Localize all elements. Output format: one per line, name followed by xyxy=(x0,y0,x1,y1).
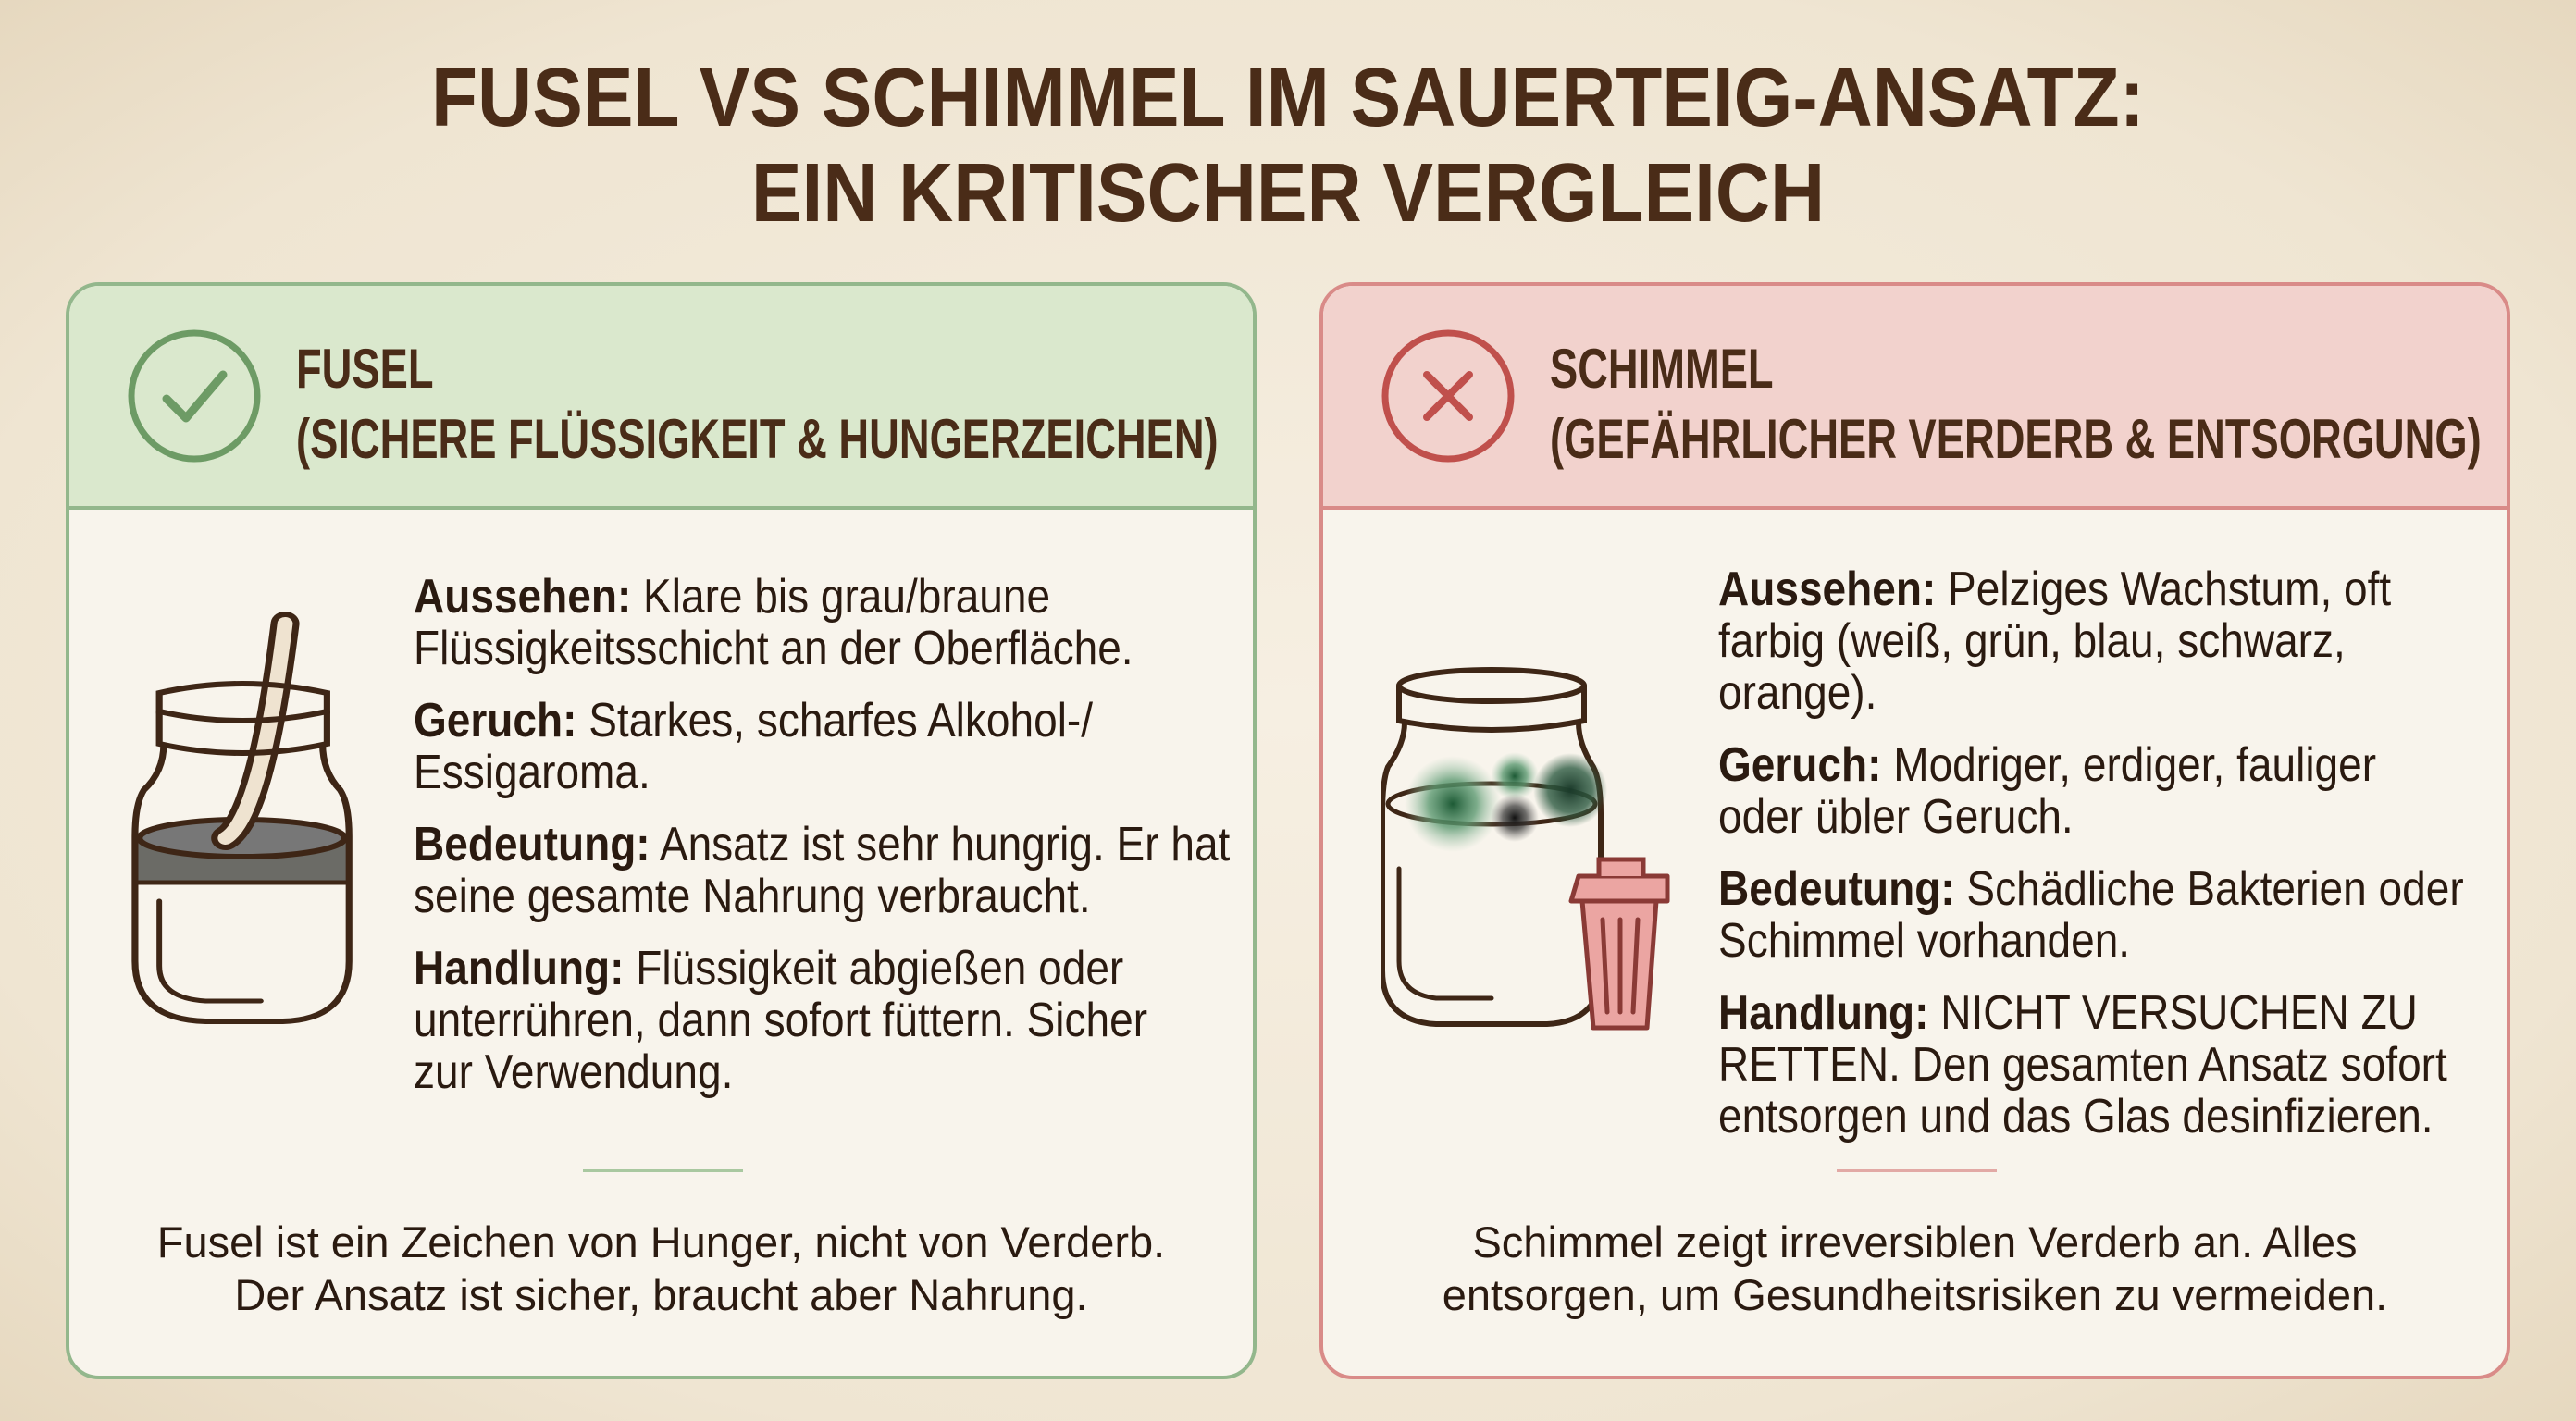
header: fusel xyxy=(69,286,1253,510)
title: EIN KRITISCHER VERGLEICH xyxy=(751,147,1825,240)
text block: fusel details: seine gesamte Nahrung verbraucht. xyxy=(414,870,1091,923)
panel: schimmel xyxy=(1319,282,2510,1379)
text block: fusel details: unterrühren, dann sofort füttern. Sicher xyxy=(414,994,1147,1047)
title xyxy=(431,52,2145,240)
text block: fusel details: Bedeutung: Ansatz ist sehr hungrig. Er hat xyxy=(414,818,1230,871)
footer: fusel summary xyxy=(157,1217,1165,1319)
text block: schimmel details: orange). xyxy=(1718,666,1876,720)
heading: schimmel: SCHIMMEL xyxy=(1550,338,1774,400)
text block: fusel details: zur Verwendung. xyxy=(414,1045,733,1099)
text block: fusel details xyxy=(414,570,1230,1099)
text block: fusel details: Geruch: Starkes, scharfes Alkohol-/ xyxy=(414,694,1093,748)
footer: fusel summary: Fusel ist ein Zeichen von Hunger, nicht von Verderb. xyxy=(157,1217,1165,1267)
heading: fusel xyxy=(296,338,1219,470)
text block: schimmel details: oder übler Geruch. xyxy=(1718,790,2074,844)
footer: fusel summary: Der Ansatz ist sicher, braucht aber Nahrung. xyxy=(234,1270,1088,1319)
footer: schimmel summary: entsorgen, um Gesundheitsrisiken zu vermeiden. xyxy=(1443,1270,2387,1319)
icon: x circle xyxy=(1382,329,1514,463)
heading: schimmel xyxy=(1550,338,2482,470)
text block: fusel details: Flüssigkeitsschicht an der Oberfläche. xyxy=(414,622,1133,675)
footer: schimmel summary: Schimmel zeigt irreversiblen Verderb an. Alles xyxy=(1472,1217,2358,1267)
icon: jar with hooch xyxy=(131,612,353,1024)
text block: schimmel details: farbig (weiß, grün, blau, schwarz, xyxy=(1718,614,2346,668)
panel: fusel xyxy=(66,282,1257,1379)
text block: fusel details: Handlung: Flüssigkeit abgießen oder xyxy=(414,942,1123,995)
title: FUSEL VS SCHIMMEL IM SAUERTEIG-ANSATZ: xyxy=(431,52,2145,144)
text block: schimmel details: Bedeutung: Schädliche Bakterien oder xyxy=(1718,862,2464,916)
heading: fusel: FUSEL xyxy=(296,338,433,400)
text block: schimmel details: Geruch: Modriger, erdiger, fauliger xyxy=(1718,738,2376,792)
text block: fusel details: Aussehen: Klare bis grau/braune xyxy=(414,570,1050,624)
heading: fusel: (SICHERE FLÜSSIGKEIT & HUNGERZEICHEN) xyxy=(296,408,1219,470)
icon: moldy jar with trash bin xyxy=(1381,667,1669,1031)
text block: schimmel details: Handlung: NICHT VERSUCHEN ZU xyxy=(1718,986,2418,1040)
icon: check circle xyxy=(128,329,261,463)
text block: schimmel details: Aussehen: Pelziges Wachstum, oft xyxy=(1718,562,2391,616)
text block: schimmel details xyxy=(1718,562,2464,1143)
text block: schimmel details: Schimmel vorhanden. xyxy=(1718,914,2130,968)
heading: schimmel: (GEFÄHRLICHER VERDERB & ENTSORGUNG) xyxy=(1550,408,2482,470)
footer: schimmel summary xyxy=(1443,1217,2387,1319)
text block: schimmel details: RETTEN. Den gesamten Ansatz sofort xyxy=(1718,1038,2447,1092)
header: schimmel xyxy=(1323,286,2507,510)
text block: fusel details: Essigaroma. xyxy=(414,746,650,799)
text block: schimmel details: entsorgen und das Glas desinfizieren. xyxy=(1718,1090,2434,1143)
